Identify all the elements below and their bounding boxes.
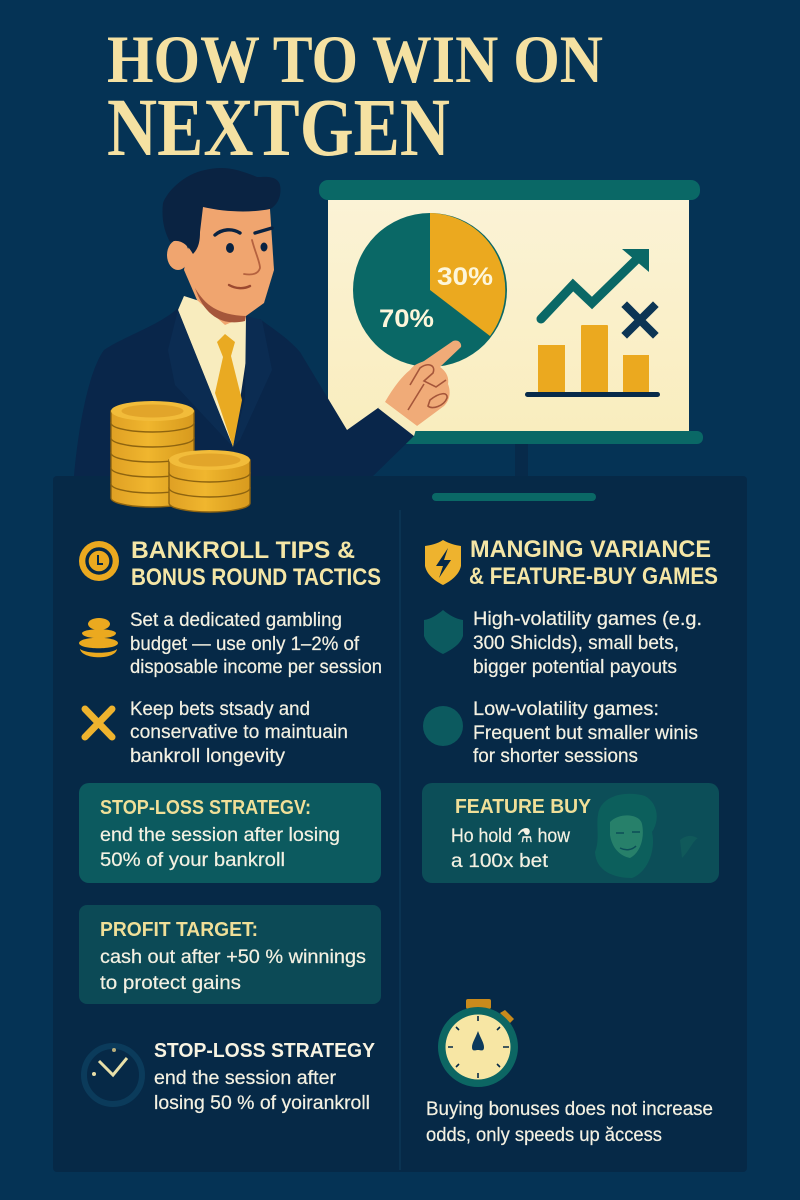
- text: stop-loss strategy: losing 50 % of yoirankroll: [154, 1093, 370, 1114]
- shirt cuff: [378, 402, 417, 436]
- text: budget tip: Set a dedicated gambling: [130, 610, 342, 631]
- callout: profit target: PROFIT TARGET:: [100, 919, 258, 941]
- callout: feature buy: Ho hold ⚗ how: [451, 826, 570, 847]
- text: low-volatility tip: Low-volatility games:: [473, 699, 659, 720]
- text: low-volatility tip: [473, 699, 698, 767]
- callout: stop-loss strategy: STOP-LOSS STRATEGV:: [100, 797, 311, 819]
- icon: lightning shield: [425, 540, 461, 585]
- text: steady bets tip: conservative to maintuain: [130, 722, 348, 743]
- text: buying bonuses note: odds, only speeds up ăccess: [426, 1125, 662, 1146]
- finger lines: [408, 365, 447, 410]
- heading: managing variance: MANGING VARIANCE: [470, 536, 711, 563]
- head and neck: [184, 206, 274, 325]
- panel: bankroll tips: [79, 537, 382, 767]
- icon: stopwatch: [438, 999, 518, 1087]
- text: buying bonuses note: [426, 1099, 713, 1146]
- pie chart: 30%: [437, 263, 493, 291]
- heading: managing variance: & FEATURE-BUY GAMES: [469, 563, 718, 590]
- text: high-volatility tip: [473, 609, 702, 678]
- callout: profit target: to protect gains: [100, 973, 241, 994]
- text: steady bets tip: bankroll longevity: [130, 746, 286, 767]
- title: HOW TO WIN ON: [107, 21, 603, 97]
- small screen base bar: [432, 493, 596, 501]
- tie: [215, 334, 242, 447]
- callout: feature buy: a 100x bet: [451, 851, 549, 872]
- projector screen: [319, 180, 703, 480]
- text: budget tip: disposable income per session: [130, 657, 382, 678]
- callout: feature buy: FEATURE BUY: [455, 796, 592, 818]
- heading: managing variance: [469, 536, 718, 590]
- text: low-volatility tip: for shorter sessions: [473, 746, 638, 767]
- bar chart with rising arrow: [525, 249, 660, 397]
- text: stop-loss strategy: STOP-LOSS STRATEGY: [154, 1040, 376, 1062]
- heading: bankroll tips: BANKROLL TIPS &: [131, 537, 355, 564]
- presenter: [74, 168, 461, 477]
- brows, nose, mouth: [215, 228, 272, 288]
- icon: faded stop-loss clock: [84, 1046, 142, 1104]
- lapels: [168, 310, 272, 447]
- callout: profit target: cash out after +50 % winnings: [100, 947, 366, 968]
- pie chart: [353, 213, 507, 367]
- callout: stop-loss strategy: end the session after losing: [100, 825, 340, 846]
- ear: [167, 240, 189, 270]
- callout: stop-loss strategy: [79, 783, 381, 883]
- callout: stop-loss strategy: 50% of your bankroll: [100, 850, 285, 871]
- text: steady bets tip: [130, 699, 348, 767]
- icon: faded medusa portrait: [595, 794, 698, 878]
- text: high-volatility tip: High-volatility games (e.g.: [473, 609, 702, 630]
- icon: teal circle: [423, 706, 463, 746]
- panel: managing variance: [423, 536, 718, 767]
- heading: bankroll tips: [131, 537, 381, 591]
- text: low-volatility tip: Frequent but smaller winis: [473, 723, 698, 744]
- icon: clock badge: [79, 541, 119, 581]
- callout: feature buy: [422, 783, 719, 883]
- icon: teal shield: [424, 610, 463, 654]
- hand: [385, 340, 461, 426]
- text: stop-loss strategy: [154, 1040, 376, 1114]
- heading: bankroll tips: BONUS ROUND TACTICS: [131, 564, 381, 591]
- jaw shadow: [195, 288, 246, 322]
- text: budget tip: [130, 610, 382, 678]
- icon: coin stack: [79, 618, 118, 657]
- text: budget tip: budget — use only 1–2% of: [130, 634, 360, 655]
- pie chart: 70%: [379, 305, 434, 333]
- text: high-volatility tip: 300 Shiclds), small bets,: [473, 633, 679, 654]
- callout: profit target: [79, 905, 381, 1004]
- text: steady bets tip: Keep bets stsady and: [130, 699, 310, 720]
- text: stop-loss strategy: end the session after: [154, 1068, 337, 1089]
- main dark panel: [53, 476, 747, 1172]
- title: NEXTGEN: [107, 81, 450, 173]
- hair: [162, 168, 281, 254]
- text: buying bonuses note: Buying bonuses does not increase: [426, 1099, 713, 1120]
- eyes: [226, 242, 268, 253]
- gold coin stacks: [111, 401, 250, 512]
- icon: gold cross: [85, 709, 112, 737]
- suit: [74, 308, 414, 477]
- shirt collar: [178, 296, 246, 447]
- text: high-volatility tip: bigger potential payouts: [473, 657, 677, 678]
- title: [107, 21, 603, 173]
